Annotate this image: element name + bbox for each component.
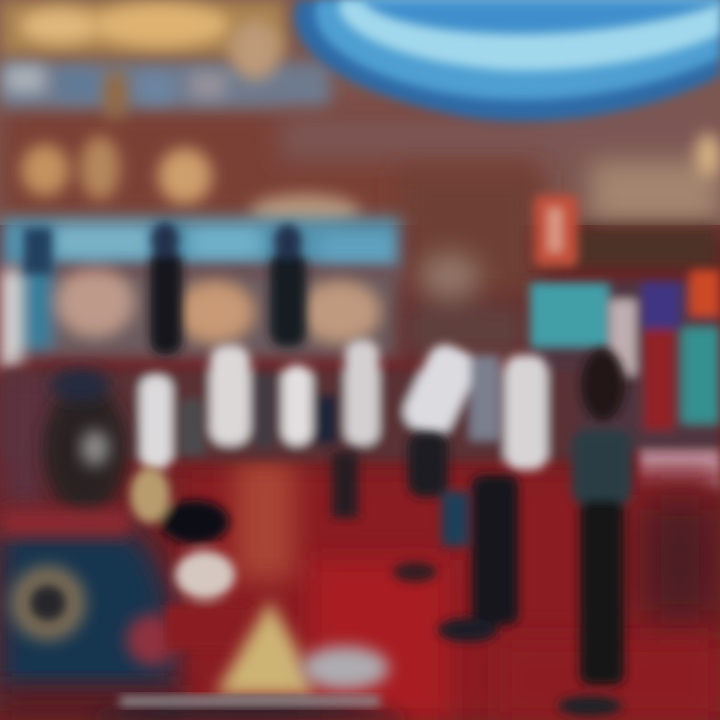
ceiling: blue ring light bbox=[294, 0, 720, 121]
chandelier: top left gold bbox=[0, 0, 285, 121]
ceiling pattern blocks bbox=[5, 65, 226, 101]
person at left: patterned blue clothing bbox=[0, 369, 180, 720]
foreground: yellow and white object at bottom bbox=[90, 600, 410, 720]
screens: colorful displays at right bbox=[530, 270, 720, 490]
dark standing silhouettes bbox=[24, 222, 306, 355]
white-clad crowd bbox=[0, 339, 580, 470]
ceiling and back wall bbox=[0, 62, 720, 300]
blue strip behind stage bbox=[0, 218, 400, 270]
sign: red orange banner bbox=[534, 195, 578, 267]
red carpet floor bbox=[180, 460, 720, 720]
dark figures in foreground: right bbox=[332, 349, 632, 716]
seated figure: white and black mid left bbox=[130, 467, 250, 650]
lamps: three gold pendant lights bbox=[21, 133, 720, 230]
grey mid area bbox=[400, 253, 530, 360]
peach stage panels bbox=[0, 262, 400, 370]
